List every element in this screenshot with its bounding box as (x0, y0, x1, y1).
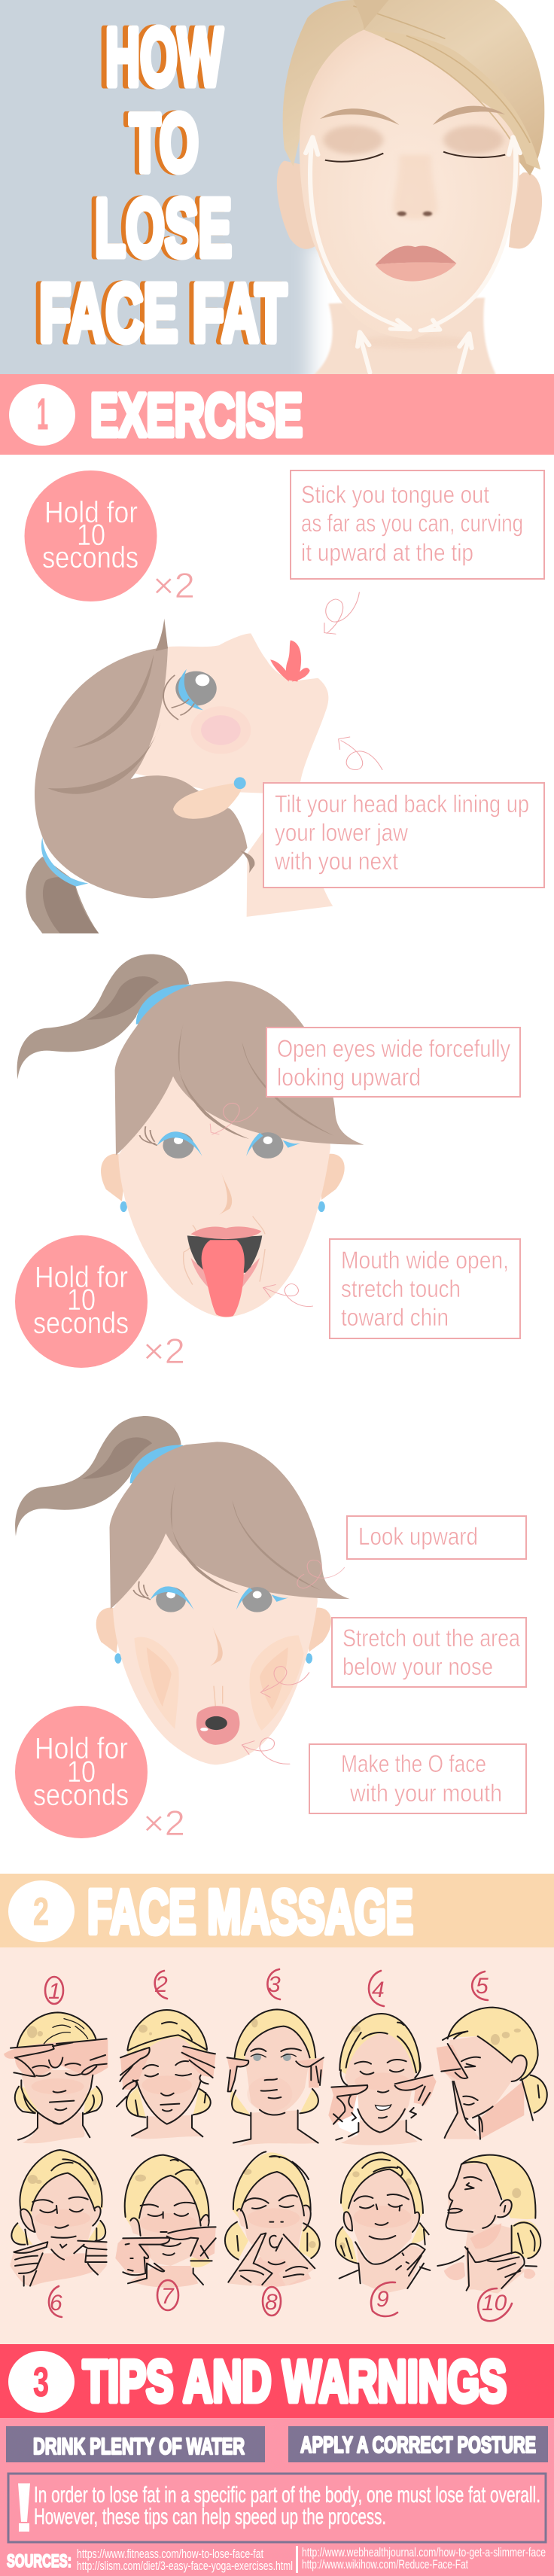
step 4: fingers on cheeks (328, 2014, 437, 2145)
hold badge: seconds (42, 541, 138, 574)
callout: stretch (332, 1618, 526, 1687)
hold badge (15, 1235, 148, 1368)
panel: massage steps (0, 1947, 554, 2344)
section band 1: exercise (0, 374, 554, 455)
step numbers: 3 (268, 1972, 281, 1997)
callout: open eyes: Open eyes wide forcefully (277, 1035, 510, 1062)
callout: look upward (347, 1516, 526, 1559)
step numbers: 7 (161, 2284, 175, 2309)
step 2: fingers on temples (117, 2010, 216, 2139)
panel: exercise two, tongue to chin (15, 955, 520, 1371)
step numbers: 1 (48, 1979, 61, 2004)
step numbers: 10 (482, 2291, 507, 2316)
step 7: fingers across lip (115, 2155, 216, 2288)
sources: http://www.wikihow.com/Reduce-Face-Fat (302, 2557, 468, 2571)
tip: water (6, 2426, 265, 2462)
repeat count: ×2 (143, 1331, 185, 1371)
callout: O face: Make the O face (341, 1750, 486, 1777)
title (35, 11, 287, 359)
step 5: side view, finger on nose (437, 2008, 547, 2139)
hold badge: Hold for (35, 1261, 128, 1294)
hold badge: 10 (67, 1755, 96, 1789)
photo: woman's face with lift arrows (277, 0, 554, 393)
panel: tips (0, 2418, 554, 2576)
sources: SOURCES: (7, 2551, 72, 2571)
callout: tilt head: with you next (274, 848, 398, 875)
hold badge: seconds (33, 1307, 129, 1340)
callout: mouth open: stretch touch (341, 1275, 461, 1302)
step numbers: 2 (154, 1972, 168, 1997)
step 1: fingers across forehead (4, 2012, 108, 2143)
callout: look upward: Look upward (358, 1523, 478, 1550)
title: FACE FAT (39, 267, 287, 359)
callout: O face: with your mouth (349, 1780, 502, 1807)
section band 2: face massage: 2 (33, 1890, 49, 1934)
illustration: girl with wide eyes and tongue out (17, 955, 364, 1317)
step 6: fingers on jaw (10, 2150, 107, 2286)
title: FACE FAT (35, 267, 282, 359)
repeat count: ×2 (153, 565, 195, 605)
step numbers: 6 (50, 2291, 62, 2316)
callout: stretch: Stretch out the area (342, 1624, 520, 1652)
step numbers: 8 (265, 2290, 278, 2315)
warning note (8, 2474, 546, 2542)
hold badge: Hold for (35, 1732, 128, 1765)
step 9: hand under chin (336, 2152, 430, 2294)
callout: stretch: below your nose (342, 1653, 493, 1680)
hold badge: 10 (67, 1283, 96, 1317)
callout: O face (309, 1744, 526, 1813)
title: TO (125, 97, 194, 189)
step 10: profile with hand on neck (437, 2155, 540, 2294)
callout: mouth open: Mouth wide open, (341, 1247, 509, 1274)
section band 1: exercise: EXERCISE (90, 382, 303, 449)
hold badge (24, 470, 157, 601)
sources: https://www.fitneass.com/how-to-lose-face-fat (77, 2547, 263, 2561)
callout: tilt head (263, 783, 544, 888)
sources (7, 2545, 546, 2573)
title: HOW (100, 11, 218, 103)
hold badge: Hold for (44, 496, 138, 529)
callout: tilt head: your lower jaw (275, 819, 409, 846)
illustration: girl making O face (15, 1416, 350, 1765)
section band 1: exercise: 1 (37, 390, 48, 439)
warning note: However, these tips can help speed up the process. (34, 2504, 386, 2529)
panel: exercise one, head tilted back (24, 470, 544, 933)
illustration: girl tilting head back with tongue out (26, 592, 382, 933)
callout: tongue: it upward at the tip (301, 539, 473, 566)
hold badge: seconds (33, 1779, 129, 1812)
callout: tongue: Stick you tongue out (301, 481, 489, 508)
repeat count: ×2 (143, 1803, 185, 1843)
header photo panel (0, 0, 554, 393)
title: LOSE (90, 182, 227, 274)
step numbers: 4 (372, 1978, 385, 2002)
hold badge: 10 (77, 519, 105, 552)
panel: exercise three, O face (15, 1416, 526, 1843)
tip: water: DRINK PLENTY OF WATER (33, 2433, 245, 2459)
callout: mouth open: toward chin (341, 1304, 449, 1331)
title: LOSE (95, 182, 232, 274)
callout: open eyes: looking upward (277, 1064, 421, 1091)
sources: http://slism.com/diet/3-easy-face-yoga-exercises.html (77, 2559, 293, 2573)
callout: tongue (291, 470, 544, 579)
callout: mouth open (330, 1239, 520, 1338)
hold badge (15, 1706, 148, 1838)
step numbers: 9 (376, 2287, 389, 2312)
section band 3: tips and warnings: 3 (33, 2358, 49, 2405)
callout: open eyes (266, 1028, 520, 1097)
title: HOW (105, 11, 223, 103)
title: TO (129, 97, 199, 189)
step 8: fingers at mouth corners (225, 2151, 320, 2287)
step numbers: 5 (476, 1974, 489, 1999)
step numbers (45, 1969, 512, 2321)
tip: posture (288, 2426, 548, 2462)
step 3: fingers under eyes (227, 2009, 324, 2147)
